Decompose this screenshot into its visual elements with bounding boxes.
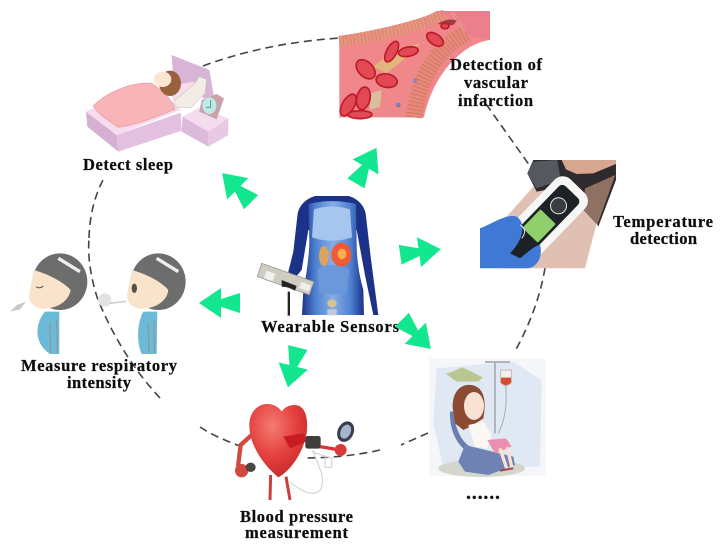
dashed circle linking the applications: [89, 38, 545, 458]
illustration: blood vessel with clot: [337, 11, 490, 119]
label: measure respiratory intensity: Measure respiratory: [21, 356, 178, 375]
arrow: to vascular detection: [343, 140, 389, 191]
label: detection of vascular infarction: [450, 55, 542, 110]
label: wearable sensors: Wearable Sensors: [261, 317, 400, 336]
arrow: to temperature detection: [398, 234, 443, 270]
arrow: to blood pressure: [273, 344, 312, 391]
arrow: to sleep detection: [212, 163, 262, 213]
child breathing in: [10, 253, 87, 354]
label: temperature detection: [613, 212, 713, 248]
label: detect sleep: Detect sleep: [83, 155, 173, 174]
icon: wearable sensor device: [257, 263, 314, 316]
illustration: patient receiving infusion: [429, 358, 545, 477]
arrow: to respiratory measure: [199, 288, 240, 318]
label: measure respiratory intensity: intensity: [67, 373, 132, 392]
label: blood pressure measurement: measurement: [245, 523, 348, 542]
label: measure respiratory intensity: [21, 356, 178, 392]
label: detection of vascular infarction: infarction: [458, 91, 533, 110]
label: blood pressure measurement: Blood pressure: [240, 507, 353, 526]
label: blood pressure measurement: [240, 507, 353, 542]
icon: sleeping person in bed: [86, 55, 228, 152]
icon: heart with blood pressure cuff: [235, 404, 357, 500]
icon: two children breathing: [10, 253, 186, 354]
child breathing out: [98, 253, 186, 354]
arrow: to other applications: [391, 309, 441, 359]
photo: temperature scanner on neck: [480, 160, 616, 270]
label: detection of vascular infarction: vascular: [464, 73, 528, 92]
central figure: human body with organs: [288, 196, 378, 315]
label: ellipsis for other applications: ......: [466, 482, 500, 504]
label: temperature detection: detection: [630, 229, 697, 248]
label: detection of vascular infarction: Detection of: [450, 55, 542, 74]
label: temperature detection: Temperature: [613, 212, 713, 231]
